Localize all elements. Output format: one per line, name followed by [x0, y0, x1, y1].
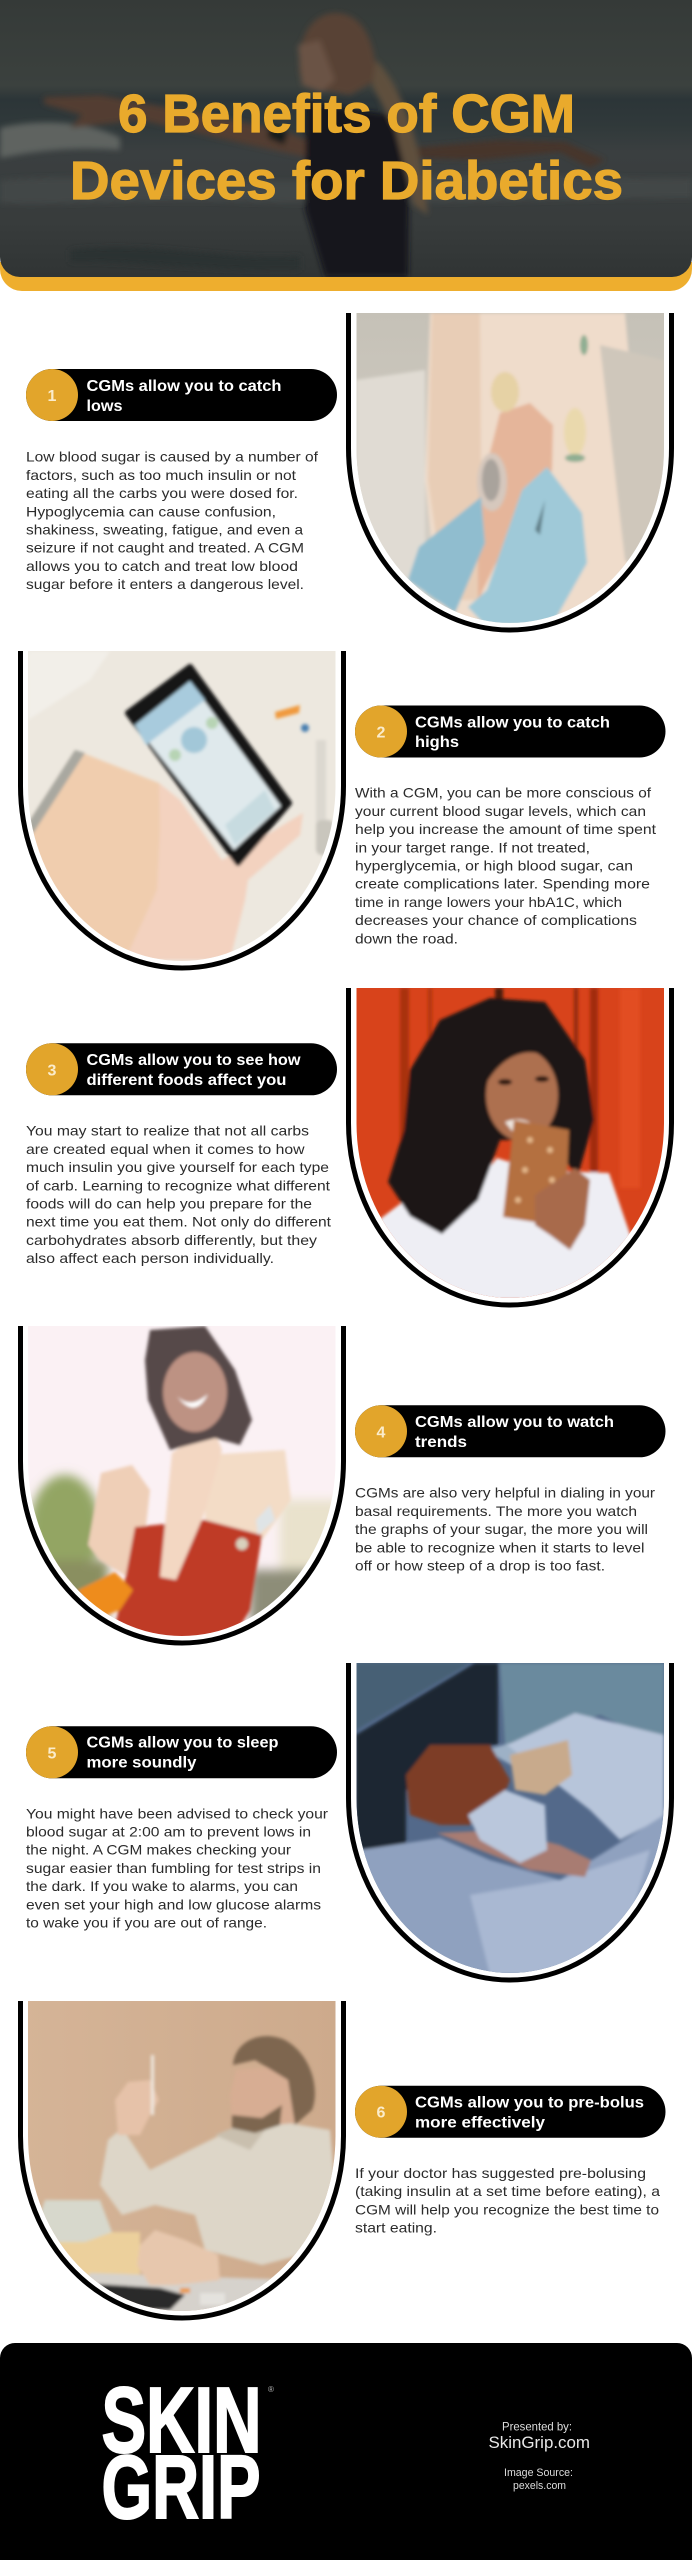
header photo: woman on beach: [0, 0, 692, 277]
body text: also affect each person individually.: [26, 1250, 274, 1266]
body text: even set your high and low glucose alarms: [26, 1896, 321, 1912]
body text: seizure if not caught and treated. A CGM: [26, 540, 304, 556]
badge heading: [355, 706, 666, 758]
footer: [0, 2343, 692, 2560]
body text: sugar before it enters a dangerous level.: [26, 576, 304, 592]
panel: benefit 5: [26, 1663, 672, 1980]
presented by: SkinGrip.com: [488, 2433, 590, 2452]
header banner: [0, 0, 692, 291]
body text: the night. A CGM makes checking your: [26, 1842, 291, 1858]
badge heading: 5: [48, 1745, 57, 1762]
arch frame with photo: man holding syringe: [20, 2001, 344, 2320]
body text: much insulin you give yourself for each type: [26, 1159, 329, 1175]
body text: Low blood sugar is caused by a number of: [26, 449, 318, 465]
badge heading: CGMs allow you to see how: [86, 1052, 301, 1069]
badge heading: [26, 1043, 337, 1095]
body text: CGM will help you recognize the best time to: [355, 2201, 659, 2217]
body text: If your doctor has suggested pre-bolusing: [355, 2165, 646, 2181]
body text: [26, 1805, 328, 1930]
body text: your current blood sugar levels, which can: [355, 803, 646, 819]
body text: [26, 1123, 331, 1266]
badge heading: CGMs allow you to pre-bolus: [415, 2095, 644, 2112]
body text: allows you to catch and treat low blood: [26, 558, 298, 574]
body text: (taking insulin at a set time before eating), a: [355, 2183, 660, 2199]
panel: benefit 1: [26, 313, 672, 630]
image source: pexels.com: [513, 2480, 566, 2492]
logo: Skin Grip: ®: [268, 2385, 274, 2394]
body text: [355, 2165, 660, 2236]
body text: in your target range. If not treated,: [355, 839, 590, 855]
panel: benefit 6: [20, 2001, 666, 2320]
body text: CGMs are also very helpful in dialing in your: [355, 1485, 655, 1501]
image source: [504, 2467, 573, 2492]
badge heading: [26, 369, 337, 421]
body text: decreases your chance of complications: [355, 912, 637, 928]
body text: be able to recognize when it starts to level: [355, 1539, 644, 1555]
badge heading: 4: [377, 1424, 386, 1441]
badge heading: [26, 1726, 337, 1778]
body text: foods will do can help you prepare for the: [26, 1196, 312, 1212]
title: Devices for Diabetics: [70, 151, 623, 211]
badge heading: CGMs allow you to catch: [415, 714, 610, 731]
panel: benefit 2: [20, 651, 666, 968]
body text: [355, 785, 656, 946]
body text: of carb. Learning to recognize what different: [26, 1177, 330, 1193]
body text: You might have been advised to check your: [26, 1805, 328, 1821]
body text: down the road.: [355, 930, 458, 946]
panel: benefit 3: [26, 988, 672, 1305]
badge heading: 3: [48, 1062, 57, 1079]
presented by: [488, 2420, 590, 2452]
body text: sugar easier than fumbling for test strips in: [26, 1860, 321, 1876]
body text: [355, 1485, 655, 1574]
arch frame with photo: sensor on arm: [348, 313, 672, 630]
body text: factors, such as too much insulin or not: [26, 467, 296, 483]
badge heading: CGMs allow you to watch: [415, 1414, 614, 1431]
presented by: Presented by:: [502, 2420, 572, 2434]
body text: are created equal when it comes to how: [26, 1141, 305, 1157]
badge heading: [355, 1405, 666, 1457]
body text: create complications later. Spending more: [355, 876, 650, 892]
body text: hyperglycemia, or high blood sugar, can: [355, 858, 633, 874]
body text: shakiness, sweating, fatigue, and even a: [26, 522, 303, 538]
badge heading: lows: [86, 398, 123, 415]
badge heading: different foods affect you: [86, 1072, 286, 1089]
body text: eating all the carbs you were dosed for.: [26, 485, 298, 501]
body text: the dark. If you wake to alarms, you can: [26, 1878, 298, 1894]
logo: Skin Grip: SKIN: [102, 2368, 262, 2472]
badge heading: trends: [415, 1434, 467, 1451]
body text: carbohydrates absorb differently, but they: [26, 1232, 317, 1248]
body text: You may start to realize that not all carbs: [26, 1123, 309, 1139]
badge heading: highs: [415, 734, 459, 751]
body text: to wake you if you are out of range.: [26, 1914, 267, 1930]
body text: [26, 449, 318, 592]
body text: Hypoglycemia can cause confusion,: [26, 503, 276, 519]
body text: basal requirements. The more you watch: [355, 1503, 637, 1519]
gold band: [0, 262, 692, 291]
arch frame with photo: smiling woman with sensor: [20, 1326, 344, 1643]
badge heading: [355, 2086, 666, 2138]
arch frame with photo: phone in hand: [20, 651, 344, 968]
body text: time in range lowers your hbA1C, which: [355, 894, 622, 910]
body text: start eating.: [355, 2220, 437, 2236]
title: [70, 84, 623, 211]
badge heading: 1: [48, 388, 57, 405]
badge heading: more soundly: [86, 1755, 197, 1772]
badge heading: 2: [377, 724, 386, 742]
logo: Skin Grip: [102, 2368, 274, 2538]
body text: With a CGM, you can be more conscious of: [355, 785, 651, 801]
badge heading: more effectively: [415, 2114, 545, 2131]
arch frame with photo: woman with chocolate: [348, 988, 672, 1305]
logo: Skin Grip: GRIP: [102, 2438, 260, 2538]
badge heading: 6: [377, 2105, 386, 2122]
badge heading: CGMs allow you to catch: [86, 378, 282, 395]
image source: Image Source:: [504, 2467, 573, 2479]
panel: benefit 4: [20, 1326, 666, 1643]
title: 6 Benefits of CGM: [118, 84, 575, 144]
body text: next time you eat them. Not only do different: [26, 1214, 331, 1230]
badge heading: CGMs allow you to sleep: [86, 1735, 279, 1752]
arch frame with photo: person sleeping: [348, 1663, 672, 1980]
body text: off or how steep of a drop is too fast.: [355, 1558, 605, 1574]
body text: blood sugar at 2:00 am to prevent lows in: [26, 1824, 311, 1840]
body text: the graphs of your sugar, the more you will: [355, 1521, 648, 1537]
body text: help you increase the amount of time spent: [355, 821, 656, 837]
